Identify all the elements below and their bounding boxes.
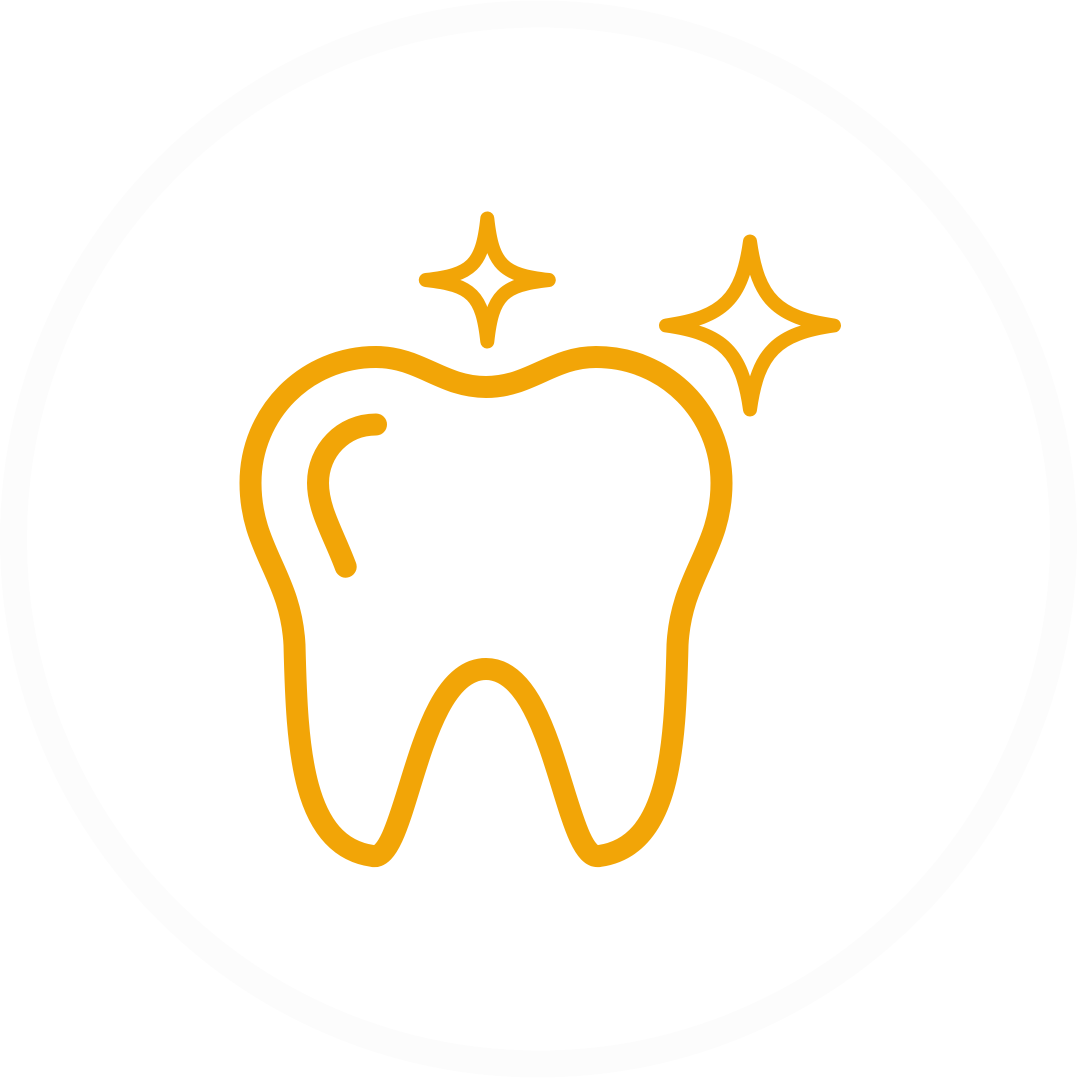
icon: large sparkle xyxy=(666,242,834,410)
icon: tooth highlight xyxy=(318,424,376,567)
icon: small sparkle xyxy=(426,218,549,342)
icon: tooth outline xyxy=(250,357,722,856)
